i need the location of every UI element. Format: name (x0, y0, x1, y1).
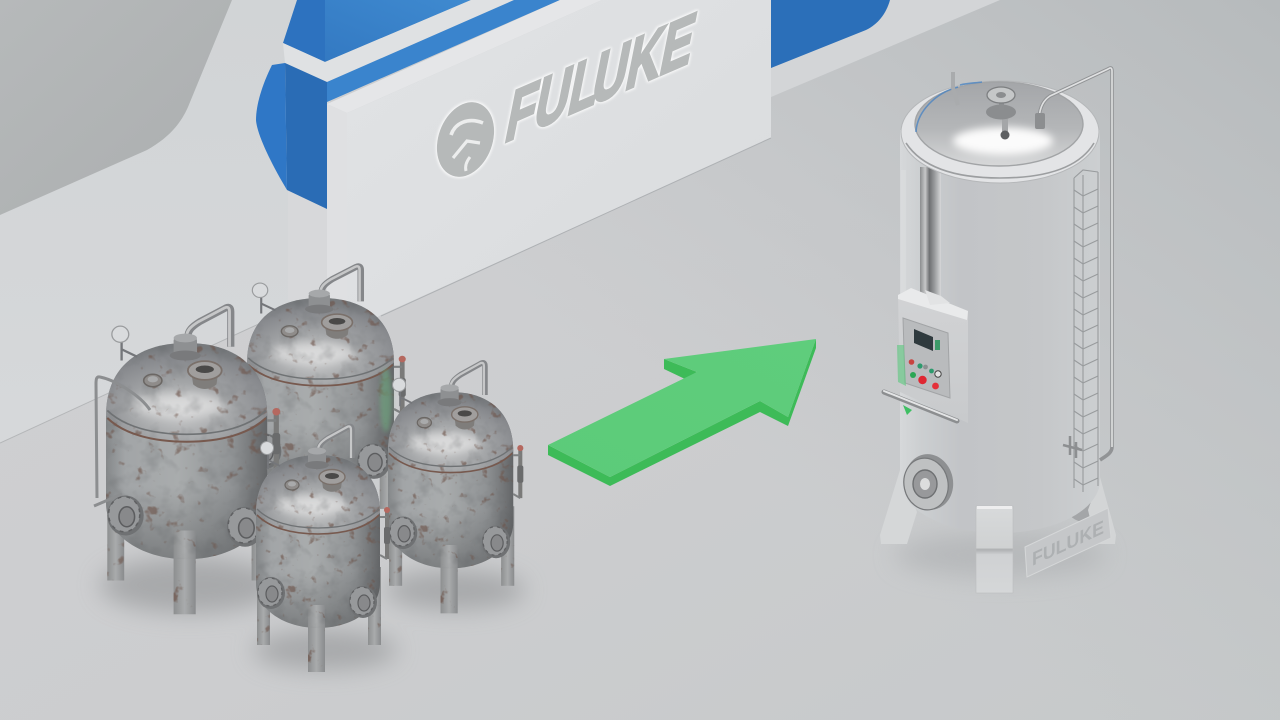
blue wall band left (256, 0, 560, 209)
lid reflection blue (916, 82, 982, 132)
logo: FULUKE (427, 0, 702, 185)
green reflection lower (903, 405, 912, 415)
sight pipe (94, 377, 150, 506)
tank body (900, 130, 1100, 533)
arrow: green upgrade arrow (548, 339, 816, 486)
front leg (976, 506, 1013, 593)
tank: rusty right (388, 363, 523, 613)
left edge reflection (901, 170, 906, 295)
lid inner (915, 82, 1083, 166)
control panel (903, 318, 950, 398)
arrow top (548, 339, 816, 477)
logo mark (427, 94, 504, 185)
sign block front (347, 0, 771, 335)
status lights (935, 340, 940, 350)
lid rim lower reflection (906, 143, 1094, 178)
hand wheel valve (986, 87, 1016, 140)
left nozzle (953, 72, 958, 105)
vertical reflection strip (920, 167, 941, 297)
tank: rusty front (256, 426, 390, 672)
handle (884, 392, 957, 421)
base ring (1067, 492, 1103, 522)
lid highlight (953, 127, 1053, 155)
bottom flange (899, 450, 958, 514)
sign block side (327, 104, 347, 335)
tank: stainless steel (880, 68, 1116, 593)
arrow side (548, 339, 816, 486)
sign block top (327, 0, 602, 113)
blue wall band right (771, 0, 890, 68)
back wall right (771, 0, 1000, 97)
wall base line (0, 305, 300, 443)
lid rim (901, 81, 1099, 183)
right leg (1088, 477, 1116, 544)
display (914, 329, 933, 351)
sign base line (381, 138, 771, 316)
tank: rusty large (94, 307, 280, 614)
back wall left (0, 0, 330, 443)
nameplate: FULUKE (1032, 517, 1104, 571)
ladder clamp (1063, 436, 1082, 458)
grey wall panel (0, 0, 232, 215)
tank: rusty back (247, 266, 406, 539)
left leg (880, 470, 917, 544)
shadow: rusty tanks (100, 557, 525, 670)
buttons (909, 359, 941, 389)
right pipe (1035, 68, 1112, 460)
green reflection (380, 368, 392, 432)
wall corner pillar (288, 190, 330, 320)
control box (884, 288, 968, 423)
ladder (1074, 170, 1098, 492)
shadow: steel tank (895, 533, 1105, 577)
green reflection (897, 345, 906, 386)
